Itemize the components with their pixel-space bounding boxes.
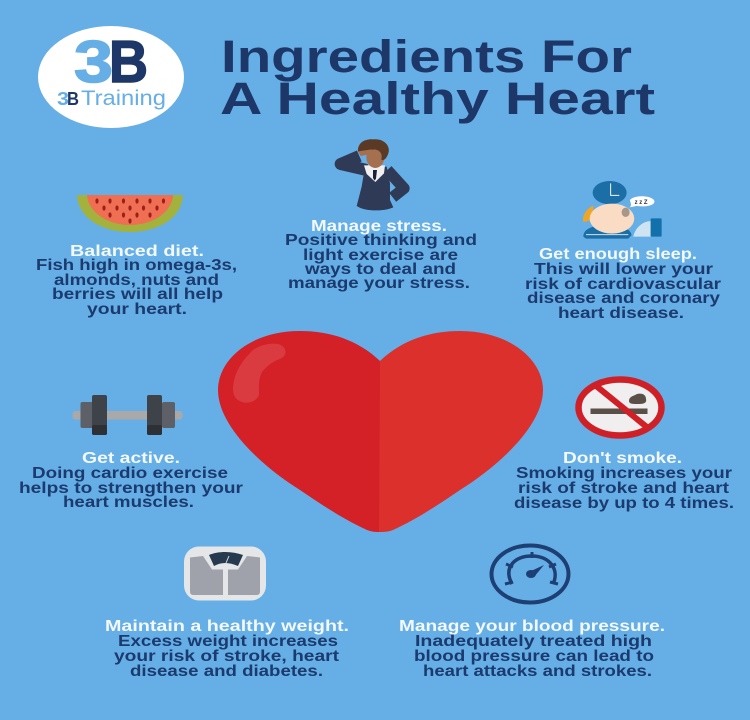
panel: balanced diet (36, 195, 237, 318)
text: blood pressure body: Inadequately treated high (415, 633, 652, 650)
heading: get active: Get active. (82, 450, 180, 467)
logo: 3B Training: 3 (74, 29, 113, 95)
panel: maintain a healthy weight (105, 546, 349, 680)
text: get active body: heart muscles. (63, 494, 194, 511)
icon: dumbbell (72, 395, 182, 435)
heart (218, 331, 543, 532)
icon: sleeping person with clock (583, 181, 662, 239)
icon: watermelon (77, 195, 183, 232)
text: manage stress body: manage your stress. (288, 275, 470, 292)
logo: 3B Training: Training (81, 87, 166, 110)
text: manage stress body: ways to deal and (304, 261, 456, 278)
text: weight body (114, 633, 340, 680)
text: sleep body: disease and coronary (527, 290, 720, 307)
text: don't smoke body (514, 465, 734, 512)
text: balanced diet body: Fish high in omega-3s, (36, 257, 237, 274)
title: A Healthy Heart (220, 73, 655, 124)
icon: sleeping person with clock: z z Z (635, 200, 648, 206)
title (220, 31, 655, 124)
text: manage stress body: light exercise are (303, 247, 458, 264)
heading: get enough sleep: Get enough sleep. (539, 246, 697, 263)
logo: 3B Training: B (67, 89, 79, 109)
heading: don't smoke: Don't smoke. (563, 450, 682, 467)
text: sleep body (525, 261, 721, 322)
panel: manage blood pressure (399, 546, 665, 680)
text: weight body: your risk of stroke, heart (114, 648, 340, 665)
text: balanced diet body: berries will all help (52, 286, 223, 303)
text: sleep body: heart disease. (558, 305, 684, 322)
title: Ingredients For (221, 31, 632, 82)
text: manage stress body (285, 232, 477, 292)
logo: 3B Training: B (109, 29, 148, 95)
text: get active body: Doing cardio exercise (32, 465, 228, 482)
panel: manage stress (285, 139, 477, 292)
text: manage stress body: Positive thinking and (285, 232, 477, 249)
heading: manage blood pressure: Manage your blood pressure. (399, 618, 665, 635)
heading: maintain a healthy weight: Maintain a healthy weight. (105, 618, 349, 635)
text: get active body: helps to strengthen your (19, 480, 243, 497)
icon: pressure gauge (492, 546, 568, 602)
panel: get enough sleep (525, 181, 721, 322)
panel: get active (19, 395, 243, 511)
text: don't smoke body: Smoking increases your (516, 465, 732, 482)
text: sleep body: This will lower your (534, 261, 713, 278)
text: blood pressure body: heart attacks and strokes. (423, 663, 652, 680)
logo: 3B Training (38, 26, 184, 128)
text: sleep body: risk of cardiovascular (525, 276, 721, 293)
text: get active body (19, 465, 243, 511)
text: don't smoke body: risk of stroke and heart (518, 480, 730, 497)
heading: manage stress: Manage stress. (311, 218, 447, 235)
icon: weighing scale (184, 546, 266, 600)
text: balanced diet body (36, 257, 237, 318)
text: weight body: Excess weight increases (118, 633, 338, 650)
icon: no smoking (578, 380, 662, 436)
logo: 3B Training: 3 (57, 89, 69, 109)
panel: don't smoke (514, 380, 734, 512)
text: weight body: disease and diabetes. (130, 663, 323, 680)
text: don't smoke body: disease by up to 4 times. (514, 495, 734, 512)
icon: stressed man (341, 139, 404, 210)
text: balanced diet body: your heart. (87, 301, 187, 318)
text: blood pressure body (414, 633, 654, 680)
text: blood pressure body: blood pressure can lead to (414, 648, 654, 665)
text: balanced diet body: almonds, nuts and (54, 272, 219, 289)
heading: balanced diet: Balanced diet. (70, 243, 204, 260)
